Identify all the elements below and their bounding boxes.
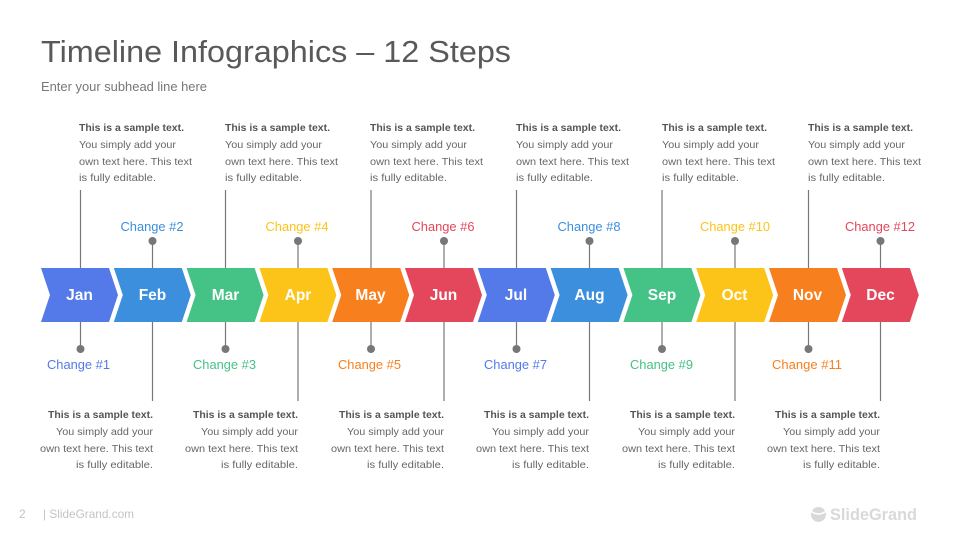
text block: Feb: This is a sample text. <box>48 409 153 421</box>
text block: Nov: is fully editable. <box>808 172 885 184</box>
text block: Jul: own text here. This text <box>516 156 629 168</box>
change label top: #12: Change #12 <box>845 220 915 234</box>
change label top: #2: Change #2 <box>120 220 184 234</box>
chevron: May <box>332 268 409 322</box>
text block: Nov: This is a sample text. <box>808 122 913 134</box>
text block: May <box>370 122 483 184</box>
chevron: Jan <box>41 268 118 322</box>
text block: Jul: This is a sample text. <box>516 122 621 134</box>
text block: Mar: This is a sample text. <box>225 122 330 134</box>
chevron: Jun: Jun <box>430 287 457 304</box>
text block: Sep: This is a sample text. <box>662 122 767 134</box>
text block: Sep <box>662 122 775 184</box>
footer site text: | SlideGrand.com <box>43 507 134 521</box>
text block: Sep: own text here. This text <box>662 156 775 168</box>
text block: Oct: This is a sample text. <box>630 409 735 421</box>
chevron: Jun <box>405 268 482 322</box>
subtitle: Enter your subhead line here <box>41 80 207 94</box>
chevron: Feb <box>114 268 191 322</box>
text block: Mar: You simply add your <box>225 139 323 151</box>
text block: Apr: own text here. This text <box>185 443 298 455</box>
text block: Aug: own text here. This text <box>476 443 589 455</box>
text block: Sep: is fully editable. <box>662 172 739 184</box>
text block: Jan: This is a sample text. <box>79 122 184 134</box>
text block: Mar: own text here. This text <box>225 156 338 168</box>
text block: Dec <box>767 409 881 471</box>
chevron: Dec <box>842 268 919 322</box>
text block: Apr: is fully editable. <box>221 459 298 471</box>
chevron: Mar <box>187 268 264 322</box>
chevron: Jul <box>478 268 555 322</box>
chevron: Mar: Mar <box>212 287 239 304</box>
text block: Feb: own text here. This text <box>40 443 153 455</box>
text block: Oct: own text here. This text <box>622 443 735 455</box>
text block: Nov: You simply add your <box>808 139 906 151</box>
chevron: Feb: Feb <box>139 287 166 304</box>
chevron: Oct <box>696 268 773 322</box>
change label top: #6: Change #6 <box>412 220 475 234</box>
text block: Aug <box>476 409 590 471</box>
chevron: Aug <box>551 268 628 322</box>
text block: Jul <box>516 122 629 184</box>
text block: Mar <box>225 122 338 184</box>
text block: Nov: own text here. This text <box>808 156 921 168</box>
text block: Aug: You simply add your <box>492 426 590 438</box>
text block: Jan: You simply add your <box>79 139 177 151</box>
change label bottom: #5: Change #5 <box>338 358 401 372</box>
text block: May: You simply add your <box>370 139 468 151</box>
chevron: Oct: Oct <box>722 287 747 304</box>
chevron: Aug: Aug <box>574 287 605 304</box>
chevron: Jul: Jul <box>505 287 527 304</box>
text block: May: own text here. This text <box>370 156 483 168</box>
text block: Feb <box>40 409 154 471</box>
change label bottom: #1: Change #1 <box>47 358 110 372</box>
text block: May: This is a sample text. <box>370 122 475 134</box>
logo: SlideGrand: SlideGrand <box>830 505 917 524</box>
text block: Feb: is fully editable. <box>76 459 153 471</box>
text block: Dec: own text here. This text <box>767 443 880 455</box>
change label bottom: #11: Change #11 <box>772 358 842 372</box>
change label bottom: #9: Change #9 <box>630 358 693 372</box>
text block: Apr: You simply add your <box>201 426 299 438</box>
text block: Nov <box>808 122 921 184</box>
chevron: Apr: Apr <box>285 287 311 304</box>
page number: 2 <box>19 507 26 521</box>
text block: Jun: own text here. This text <box>331 443 444 455</box>
chevron: Sep: Sep <box>648 287 676 304</box>
text block: Feb: You simply add your <box>56 426 154 438</box>
chevron: Dec: Dec <box>866 287 895 304</box>
text block: Jan <box>79 122 192 184</box>
text block: Jan: own text here. This text <box>79 156 192 168</box>
text block: Apr <box>185 409 299 471</box>
text block: Jun: This is a sample text. <box>339 409 444 421</box>
text block: Dec: is fully editable. <box>803 459 880 471</box>
chevron: Nov <box>769 268 846 322</box>
text block: Jul: is fully editable. <box>516 172 593 184</box>
chevron: Apr <box>259 268 336 322</box>
text block: May: is fully editable. <box>370 172 447 184</box>
text block: Apr: This is a sample text. <box>193 409 298 421</box>
chevron: Nov: Nov <box>793 287 823 304</box>
change label bottom: #3: Change #3 <box>193 358 256 372</box>
title: Timeline Infographics – 12 Steps <box>41 34 511 69</box>
text block: Dec: This is a sample text. <box>775 409 880 421</box>
text block: Aug: is fully editable. <box>512 459 589 471</box>
text block: Mar: is fully editable. <box>225 172 302 184</box>
text block: Aug: This is a sample text. <box>484 409 589 421</box>
change label top: #4: Change #4 <box>266 220 329 234</box>
text block: Oct: is fully editable. <box>658 459 735 471</box>
text block: Jun <box>331 409 445 471</box>
text block: Sep: You simply add your <box>662 139 760 151</box>
change label bottom: #7: Change #7 <box>484 358 547 372</box>
chevron: Jan: Jan <box>66 287 93 304</box>
chevron: Sep <box>623 268 700 322</box>
leader lines and dots <box>76 190 884 401</box>
text block: Oct <box>622 409 736 471</box>
text block: Jun: is fully editable. <box>367 459 444 471</box>
text block: Oct: You simply add your <box>638 426 736 438</box>
change label top: #10: Change #10 <box>700 220 770 234</box>
text block: Dec: You simply add your <box>783 426 881 438</box>
text block: Jun: You simply add your <box>347 426 445 438</box>
text block: Jan: is fully editable. <box>79 172 156 184</box>
chevron: May: May <box>355 287 386 304</box>
change label top: #8: Change #8 <box>558 220 621 234</box>
text block: Jul: You simply add your <box>516 139 614 151</box>
